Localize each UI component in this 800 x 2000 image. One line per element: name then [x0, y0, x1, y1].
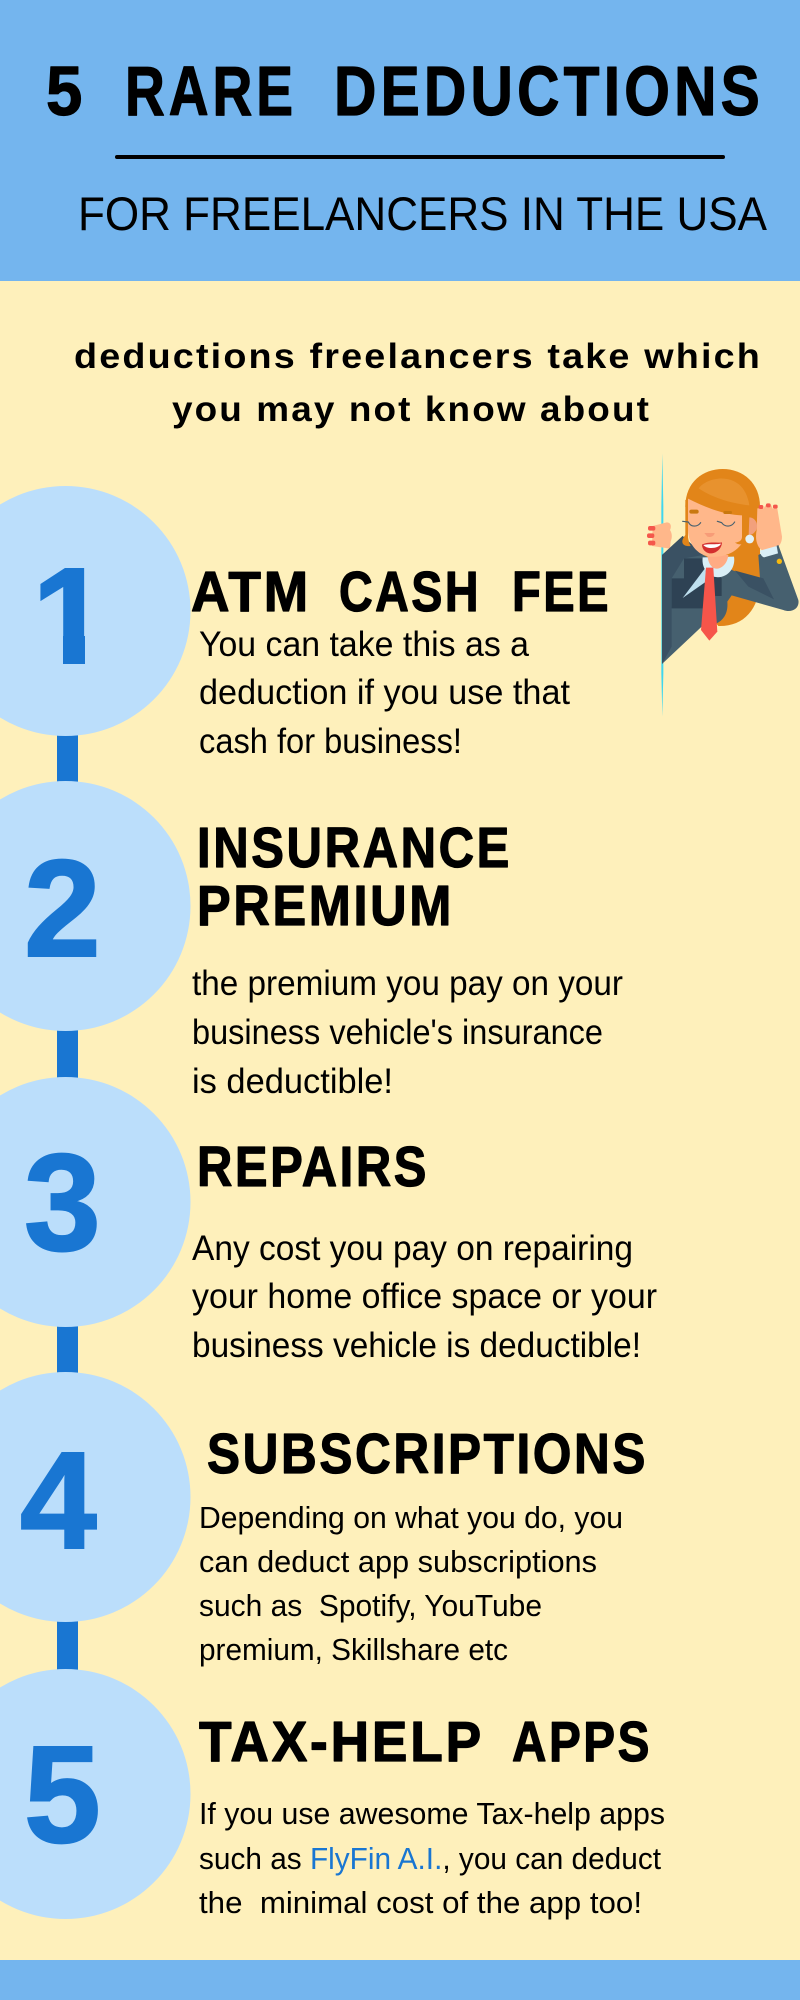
step 4 circle: 4	[20, 1424, 97, 1578]
step 3 circle: 3	[24, 1126, 101, 1280]
step 5 text: the minimal cost of the app too!	[199, 1885, 642, 1920]
step 3 text: your home office space or your	[192, 1277, 657, 1316]
face	[688, 499, 742, 557]
title: RARE	[125, 52, 297, 130]
brows, eyes, nose, mouth	[689, 510, 699, 514]
step 1 heading: CASH	[339, 560, 481, 624]
step 3 heading: REPAIRS	[197, 1135, 429, 1199]
step 1 circle	[0, 486, 190, 736]
step 1 text: cash for business!	[199, 722, 462, 761]
title: 5	[46, 52, 87, 130]
panel: top header band	[0, 0, 800, 281]
step 1 circle: 1	[32, 540, 109, 694]
timeline connector	[57, 700, 78, 1700]
bottom band	[0, 1960, 800, 2000]
intro heading: you may not know about	[172, 390, 651, 429]
step 4 text	[199, 1500, 623, 1667]
step 1 text: deduction if you use that	[199, 673, 570, 712]
step 4 text: premium, Skillshare etc	[199, 1632, 508, 1667]
title	[46, 52, 764, 130]
step 3 circle	[0, 1077, 190, 1327]
step 5 heading: APPS	[512, 1710, 652, 1774]
step 4 text: can deduct app subscriptions	[199, 1544, 597, 1579]
step 5 text	[199, 1796, 665, 1920]
step 5 circle: 5	[24, 1718, 101, 1872]
icon: woman peeking and listening	[647, 453, 799, 717]
step 2 heading: PREMIUM	[197, 874, 454, 938]
jacket body	[662, 536, 799, 664]
hair back	[685, 469, 760, 626]
subtitle: FOR FREELANCERS IN THE USA	[78, 187, 768, 240]
step 1 heading: FEE	[512, 560, 611, 624]
ear and earring	[749, 517, 757, 535]
step 3 text: Any cost you pay on repairing	[192, 1229, 633, 1268]
step 2 text: business vehicle's insurance	[192, 1013, 603, 1052]
step 4 heading: SUBSCRIPTIONS	[207, 1422, 648, 1486]
step 4 text: such as Spotify, YouTube	[199, 1588, 542, 1623]
step 1 heading: ATM	[191, 560, 311, 624]
step 2 heading	[197, 816, 512, 938]
cuff	[760, 546, 778, 557]
left hand	[652, 522, 672, 549]
step 4 circle	[0, 1372, 190, 1622]
step 1 text	[199, 625, 570, 761]
tie	[701, 568, 717, 641]
step 4 text: Depending on what you do, you	[199, 1500, 623, 1535]
step 2 circle: 2	[24, 832, 101, 986]
step 5 heading	[199, 1710, 652, 1774]
step 2 text: is deductible!	[192, 1062, 393, 1101]
step 5 text: If you use awesome Tax-help apps	[199, 1796, 665, 1831]
intro heading: deductions freelancers take which	[74, 337, 762, 376]
intro heading	[74, 337, 762, 429]
step 1 text: You can take this as a	[199, 625, 530, 664]
step 3 text: business vehicle is deductible!	[192, 1326, 641, 1365]
step 2 heading: INSURANCE	[197, 816, 512, 880]
step 5 text: such as FlyFin A.I., you can deduct	[199, 1841, 661, 1876]
lapel and collar	[683, 568, 708, 598]
step 2 text	[192, 964, 623, 1101]
step 2 text: the premium you pay on your	[192, 964, 623, 1003]
raised hand	[756, 505, 782, 551]
step 3 text	[192, 1229, 657, 1365]
step 5 circle	[0, 1669, 190, 1919]
step 1 heading	[191, 560, 611, 624]
step 2 circle	[0, 781, 190, 1031]
step 5 heading: TAX-HELP	[199, 1710, 484, 1774]
